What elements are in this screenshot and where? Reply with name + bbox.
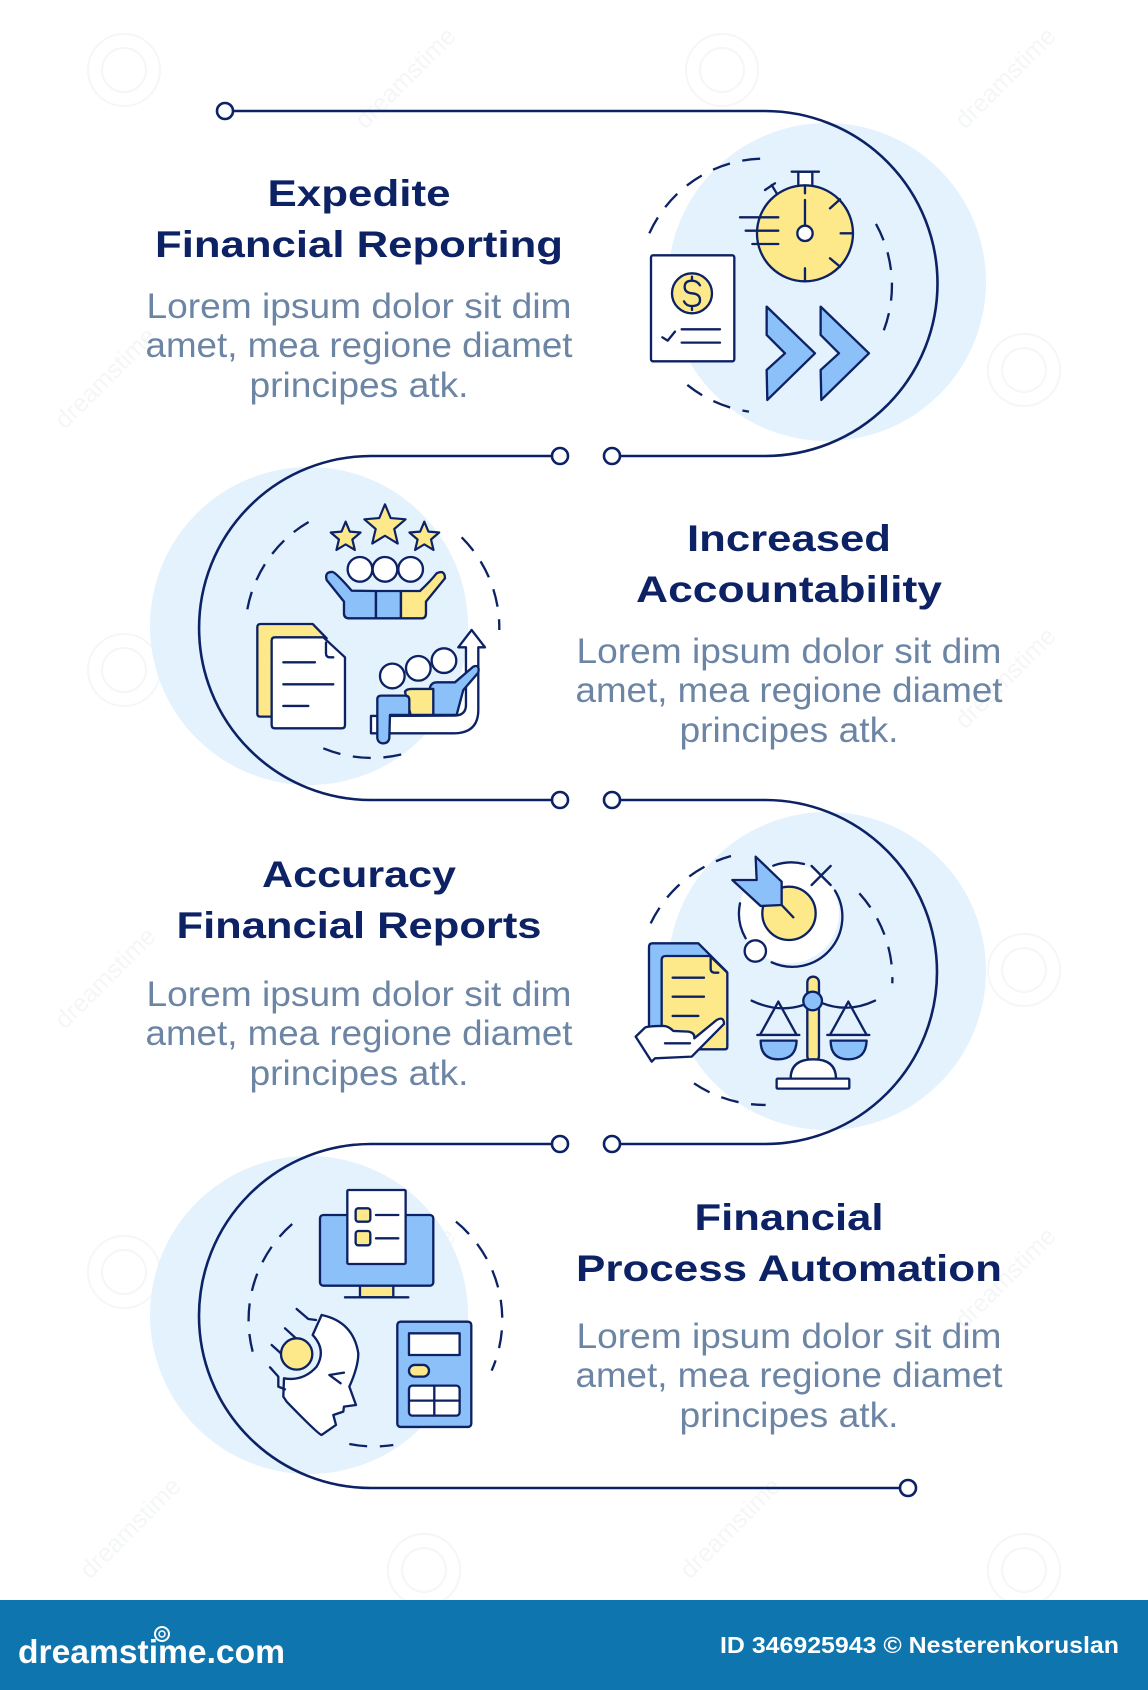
background circle: step 3 — [668, 812, 986, 1130]
heading: Financial Process Automation — [576, 1197, 1002, 1289]
body text: step 2 — [576, 632, 1003, 750]
background circle: step 4 — [150, 1156, 468, 1474]
heading: Expedite Financial Reporting: Expedite — [268, 173, 450, 214]
icon: document in hand — [636, 943, 727, 1062]
footer bar — [0, 1600, 1148, 1690]
body text: step 1: amet, mea regione diamet — [146, 326, 573, 365]
heading: Accuracy Financial Reports: Financial Reports — [176, 905, 542, 946]
heading: Expedite Financial Reporting: Financial Reporting — [155, 224, 563, 265]
icon: calculator — [397, 1322, 471, 1427]
body text: step 3: amet, mea regione diamet — [146, 1014, 573, 1053]
heading: Increased Accountability: Increased — [687, 518, 891, 559]
icon: team with raised arms — [326, 557, 445, 618]
icon: team growth arrow — [371, 630, 485, 743]
icon: target with arrow — [732, 857, 842, 967]
text: dreamstime — [349, 1222, 462, 1334]
background circle: step 1 — [668, 123, 986, 441]
icon group: computer checklist, AI head and calculator — [249, 1190, 502, 1446]
body text: step 4: amet, mea regione diamet — [576, 1356, 1003, 1395]
body text: step 2: principes atk. — [680, 711, 898, 750]
icon: stopwatch — [740, 172, 853, 281]
body text: step 3 — [146, 975, 573, 1093]
text: dreamstime — [949, 622, 1062, 734]
footer logo: dreamstime.com — [18, 1633, 285, 1670]
heading: Financial Process Automation: Process Automation — [576, 1248, 1002, 1289]
heading: Increased Accountability — [636, 518, 943, 610]
panel: step 1 text — [146, 173, 573, 405]
panel: step 2 text — [576, 518, 1003, 750]
body text: step 1: Lorem ipsum dolor sit dim — [146, 287, 572, 326]
icon: financial document — [651, 255, 734, 361]
heading: Accuracy Financial Reports: Accuracy — [262, 854, 456, 895]
body text: step 1 — [146, 287, 573, 405]
icon group: target, document and scales — [636, 856, 892, 1105]
panel: step 4 text — [576, 1197, 1003, 1435]
body text: step 2: amet, mea regione diamet — [576, 671, 1003, 710]
text: dreamstime — [949, 22, 1062, 134]
body text: step 4: principes atk. — [680, 1396, 898, 1435]
icon: AI head — [270, 1309, 358, 1435]
heading: Expedite Financial Reporting — [155, 173, 563, 265]
heading: Accuracy Financial Reports — [176, 854, 542, 946]
body text: step 4 — [576, 1317, 1003, 1435]
icon: fast-forward chevrons — [767, 307, 869, 400]
footer credit: ID 346925943 © Nesterenkoruslan — [720, 1632, 1119, 1658]
body text: step 3: Lorem ipsum dolor sit dim — [146, 975, 572, 1014]
text: dreamstime — [674, 1472, 787, 1584]
text: dreamstime — [49, 922, 162, 1034]
body text: step 4: Lorem ipsum dolor sit dim — [576, 1317, 1002, 1356]
icon group: team rating, documents and growth — [247, 504, 499, 758]
icon: balance scales — [752, 977, 875, 1089]
text: dreamstime — [349, 22, 462, 134]
panel: step 3 text — [146, 854, 573, 1093]
heading: Financial Process Automation: Financial — [694, 1197, 884, 1238]
icon: documents — [257, 624, 345, 728]
icon: rating stars — [331, 504, 439, 550]
body text: step 3: principes atk. — [250, 1054, 468, 1093]
icon: computer with checklist — [320, 1190, 433, 1297]
icon group: stopwatch, report and fast-forward — [649, 159, 892, 412]
text: dreamstime — [74, 1472, 187, 1584]
text: dreamstime — [49, 322, 162, 434]
text: dreamstime — [949, 1222, 1062, 1334]
connector line path — [199, 103, 938, 1496]
background circle: step 2 — [150, 467, 468, 785]
body text: step 1: principes atk. — [250, 366, 468, 405]
body text: step 2: Lorem ipsum dolor sit dim — [576, 632, 1002, 671]
heading: Increased Accountability: Accountability — [636, 569, 943, 610]
